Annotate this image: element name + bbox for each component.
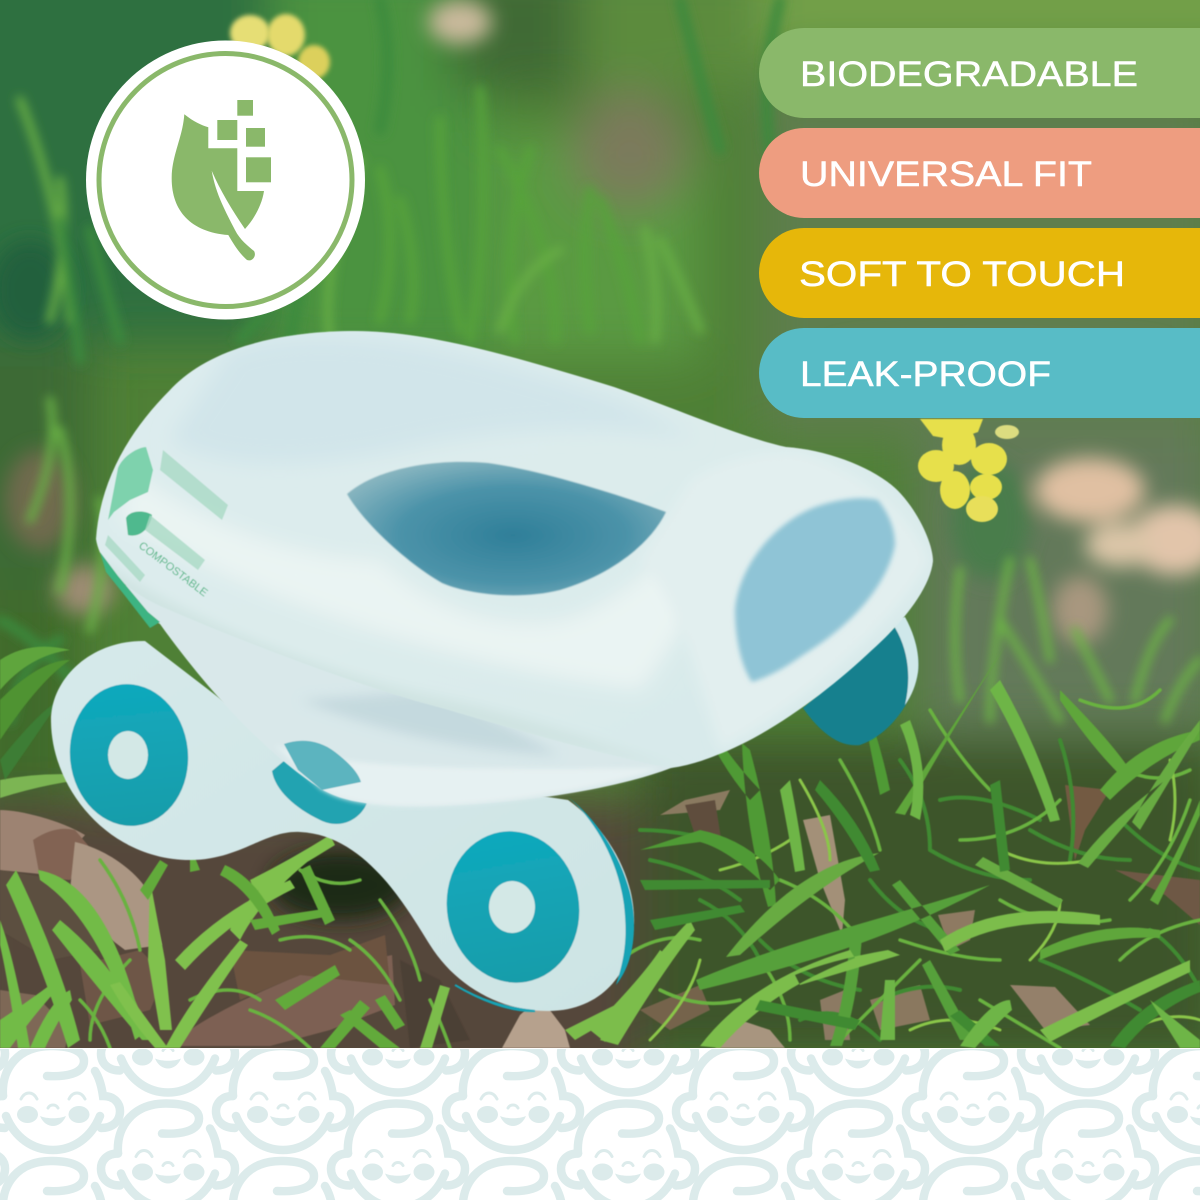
potty base	[51, 617, 918, 1011]
left wheel	[69, 684, 189, 826]
feature pill: leak-proof	[759, 328, 1200, 418]
teal rim of base	[568, 797, 634, 985]
seat soft shading	[118, 344, 920, 740]
feature pill: universal fit	[759, 128, 1200, 218]
fine foreground grass	[80, 690, 1200, 1048]
bottom baby-face pattern band	[0, 1048, 1200, 1200]
foreground grass blades	[0, 642, 1200, 1048]
center suction	[272, 760, 367, 824]
feature pill: biodegradable	[759, 28, 1200, 118]
teal suction seen through the bag	[284, 741, 361, 790]
seat body	[96, 331, 933, 768]
biodegradable bag	[96, 331, 933, 806]
feature pill: universal fit: UNIVERSAL FIT	[800, 155, 1092, 194]
feature pill: soft to touch	[759, 228, 1200, 318]
feature pill: soft to touch: SOFT TO TOUCH	[799, 255, 1125, 294]
badge: biodegradable leaf icon	[86, 40, 365, 320]
feature pill: biodegradable: BIODEGRADABLE	[800, 55, 1138, 94]
background grass blades	[0, 0, 1200, 720]
feature pill: leak-proof: LEAK-PROOF	[800, 355, 1051, 394]
center hole	[347, 462, 666, 595]
green printing on bag	[100, 447, 228, 628]
blue side pad	[735, 498, 895, 682]
right wheel	[446, 830, 580, 984]
back wheel	[802, 627, 910, 746]
left foreground grass	[0, 646, 70, 798]
base body	[51, 641, 634, 1011]
green printing on bag: COMPOSTABLE	[136, 540, 210, 599]
yellow flowers	[230, 14, 1019, 522]
icon: leaf with dissolving pixels	[172, 100, 271, 260]
lower translucent bag	[125, 584, 672, 804]
dead leaves	[0, 785, 1200, 1048]
